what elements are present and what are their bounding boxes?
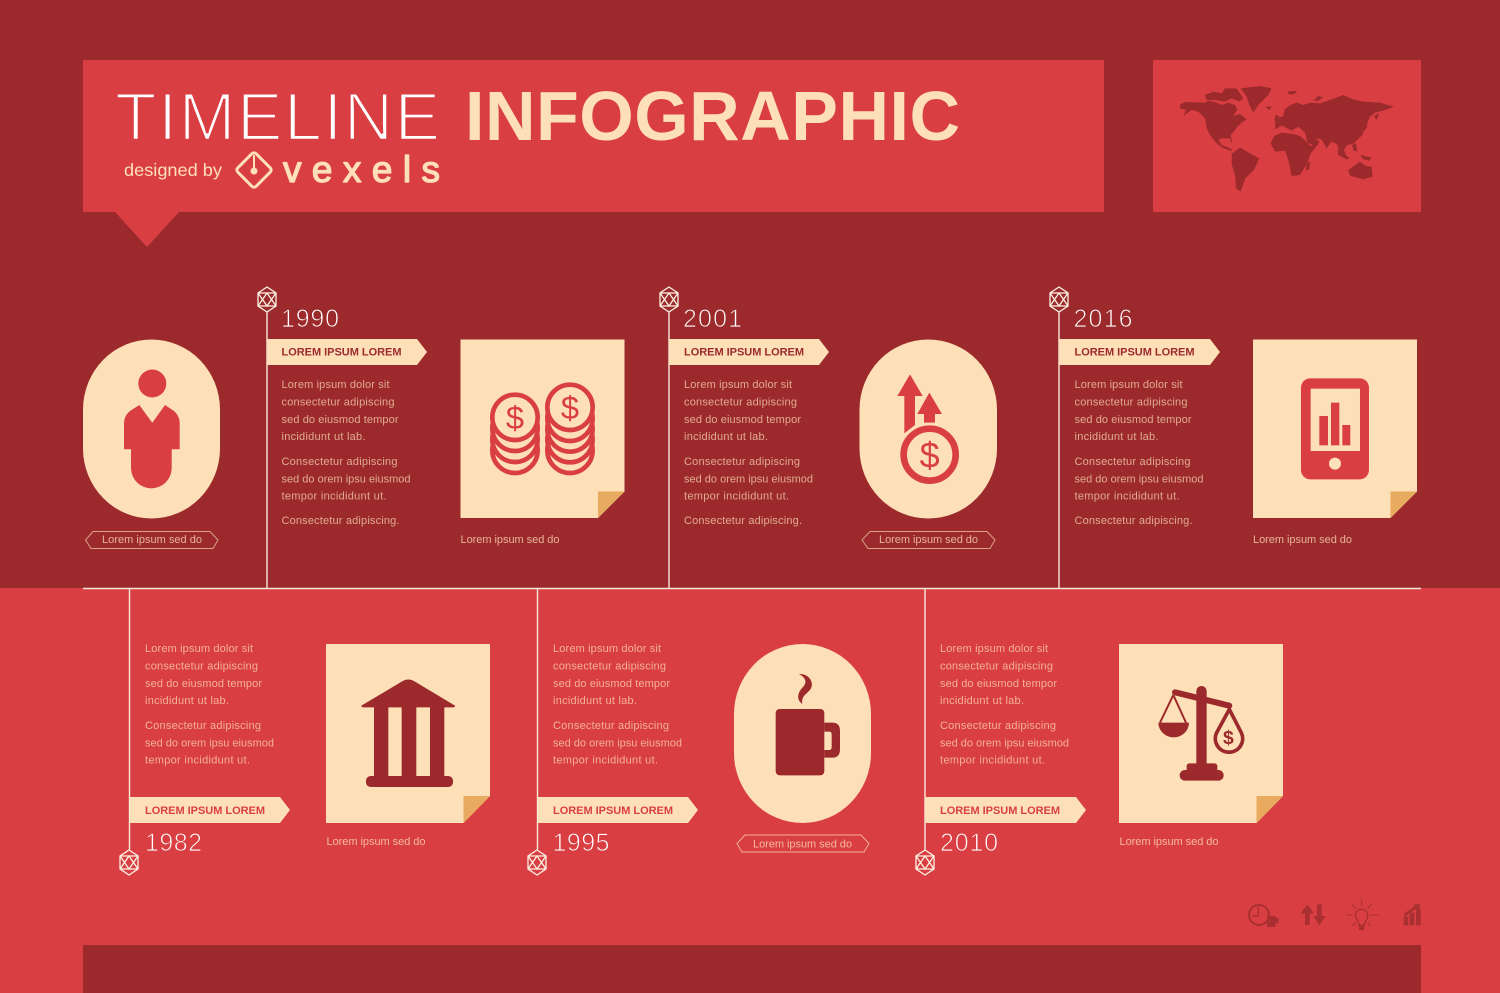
pill: growth [860, 340, 997, 518]
body text [940, 643, 1069, 766]
body text: incididunt ut lab. [684, 431, 768, 443]
caption: Lorem ipsum sed do [460, 534, 560, 546]
panel: person [83, 340, 220, 548]
icon: clock and cup [1249, 905, 1279, 927]
caption: Lorem ipsum sed do [1120, 836, 1218, 848]
year: 2016 [1074, 305, 1132, 333]
body text: sed do eiusmod tempor [940, 678, 1057, 690]
body text: sed do orem ipsu eiusmod [940, 738, 1069, 750]
body text: Consectetur adipiscing. [282, 515, 400, 527]
body text: incididunt ut lab. [940, 695, 1024, 707]
timeline axis [83, 588, 1421, 590]
icon: coffee cup [776, 674, 840, 775]
body text: consectetur adipiscing [684, 396, 797, 408]
body text [553, 643, 682, 766]
body text: Consectetur adipiscing [1074, 456, 1190, 468]
body text: tempor incididunt ut. [553, 754, 658, 766]
icon: coins [492, 385, 593, 473]
icon: balance scales: $ [1223, 728, 1234, 749]
note card: bank [326, 644, 490, 823]
body text: consectetur adipiscing [282, 396, 394, 408]
ribbon heading: LOREM IPSUM LOREM [940, 805, 1060, 817]
icon row [1249, 900, 1421, 930]
ribbon heading: LOREM IPSUM LOREM [1074, 346, 1194, 358]
marker [120, 850, 138, 875]
body text: incididunt ut lab. [145, 695, 229, 707]
body text: tempor incididunt ut. [282, 490, 386, 502]
icon: bank [361, 679, 455, 787]
note card: scales [1119, 644, 1283, 823]
ribbon heading [538, 797, 698, 823]
caption tag [862, 532, 995, 548]
designed by vexels logo: designed by [124, 160, 222, 180]
panel: 1995 [528, 588, 871, 875]
icon: coins: $ [506, 399, 524, 436]
year: 2010 [940, 829, 998, 857]
icon: light bulb [1347, 900, 1379, 930]
world map [1180, 86, 1394, 192]
body text [145, 643, 274, 766]
body text: Lorem ipsum dolor sit [940, 643, 1048, 655]
icon: arrows and dollar coin [897, 374, 956, 481]
designed by vexels logo [124, 149, 440, 190]
ribbon heading [130, 797, 290, 823]
marker [916, 850, 934, 875]
body text: tempor incididunt ut. [145, 754, 250, 766]
icon: balance scales [1158, 686, 1243, 781]
body text: sed do orem ipsu eiusmod [1074, 474, 1204, 486]
body text: sed do eiusmod tempor [282, 414, 399, 426]
body text: sed do eiusmod tempor [1074, 414, 1192, 426]
icon: person [83, 340, 220, 518]
ribbon heading: LOREM IPSUM LOREM [684, 346, 804, 358]
body text: sed do orem ipsu eiusmod [145, 738, 274, 750]
body text: Lorem ipsum dolor sit [282, 379, 390, 391]
icon: growth bar chart [1404, 904, 1421, 925]
panel: 2016 [1050, 287, 1417, 588]
body text: tempor incididunt ut. [1074, 490, 1180, 502]
body text: sed do orem ipsu eiusmod [282, 474, 410, 486]
ribbon heading [669, 339, 829, 365]
panel: 1982 [120, 588, 490, 875]
body text: incididunt ut lab. [282, 431, 366, 443]
body text: Consectetur adipiscing. [684, 515, 802, 527]
body text: Lorem ipsum dolor sit [553, 643, 661, 655]
title: INFOGRAPHIC [465, 77, 960, 155]
body text: tempor incididunt ut. [684, 490, 789, 502]
ribbon heading [925, 797, 1086, 823]
body text: Consectetur adipiscing [940, 720, 1056, 732]
body text: Consectetur adipiscing [553, 720, 669, 732]
body text: incididunt ut lab. [553, 695, 637, 707]
marker [258, 287, 276, 312]
caption tag: Lorem ipsum sed do [879, 534, 978, 546]
panel: world map [1153, 60, 1421, 212]
ribbon heading: LOREM IPSUM LOREM [282, 346, 402, 358]
body text: sed do eiusmod tempor [684, 414, 801, 426]
body text: tempor incididunt ut. [940, 754, 1045, 766]
pill: coffee [734, 644, 871, 823]
body text [282, 379, 410, 527]
body text: consectetur adipiscing [1074, 396, 1188, 408]
body text: sed do orem ipsu eiusmod [553, 738, 682, 750]
body text [1074, 379, 1204, 527]
marker [660, 287, 678, 312]
body text: consectetur adipiscing [145, 660, 258, 672]
body text: Lorem ipsum dolor sit [1074, 379, 1182, 391]
body text: sed do orem ipsu eiusmod [684, 474, 813, 486]
ribbon heading [267, 339, 427, 365]
year: 2001 [683, 305, 742, 333]
body text: consectetur adipiscing [553, 660, 666, 672]
marker [528, 850, 546, 875]
body text: Lorem ipsum dolor sit [145, 643, 253, 655]
ribbon heading: LOREM IPSUM LOREM [145, 805, 265, 817]
ribbon heading [1059, 339, 1220, 365]
panel: 1990 [258, 287, 624, 588]
caption tag: Lorem ipsum sed do [753, 838, 852, 850]
icon: phone chart [1301, 378, 1369, 479]
bottom bar [83, 945, 1421, 993]
caption tag [737, 835, 869, 852]
note card: coins [460, 340, 624, 518]
year: 1995 [552, 829, 610, 857]
caption: Lorem ipsum sed do [326, 836, 426, 848]
icon: up and down arrows [1301, 904, 1326, 925]
title: TIMELINE [115, 79, 440, 155]
year: 1982 [145, 829, 202, 857]
body text: sed do eiusmod tempor [145, 678, 262, 690]
panel: 2001 [660, 287, 997, 588]
body text: Consectetur adipiscing. [1074, 515, 1192, 527]
body text [684, 379, 813, 527]
caption tag [86, 532, 218, 548]
body text: sed do eiusmod tempor [553, 678, 670, 690]
body text: Consectetur adipiscing [145, 720, 261, 732]
marker [1050, 287, 1068, 312]
body text: Lorem ipsum dolor sit [684, 379, 792, 391]
caption: Lorem ipsum sed do [1253, 534, 1352, 546]
designed by vexels logo: vexels [283, 149, 440, 190]
header banner [83, 60, 1104, 247]
caption tag: Lorem ipsum sed do [102, 534, 202, 546]
ribbon heading: LOREM IPSUM LOREM [553, 805, 673, 817]
body text: Consectetur adipiscing [684, 456, 800, 468]
year: 1990 [281, 305, 339, 333]
body text: incididunt ut lab. [1074, 431, 1158, 443]
body text: consectetur adipiscing [940, 660, 1053, 672]
title [115, 77, 960, 155]
note card: phone [1253, 340, 1417, 518]
icon: arrows and dollar coin: $ [920, 435, 940, 476]
icon: coins: $ [561, 389, 579, 426]
panel: 2010 [916, 588, 1283, 875]
body text: Consectetur adipiscing [282, 456, 398, 468]
